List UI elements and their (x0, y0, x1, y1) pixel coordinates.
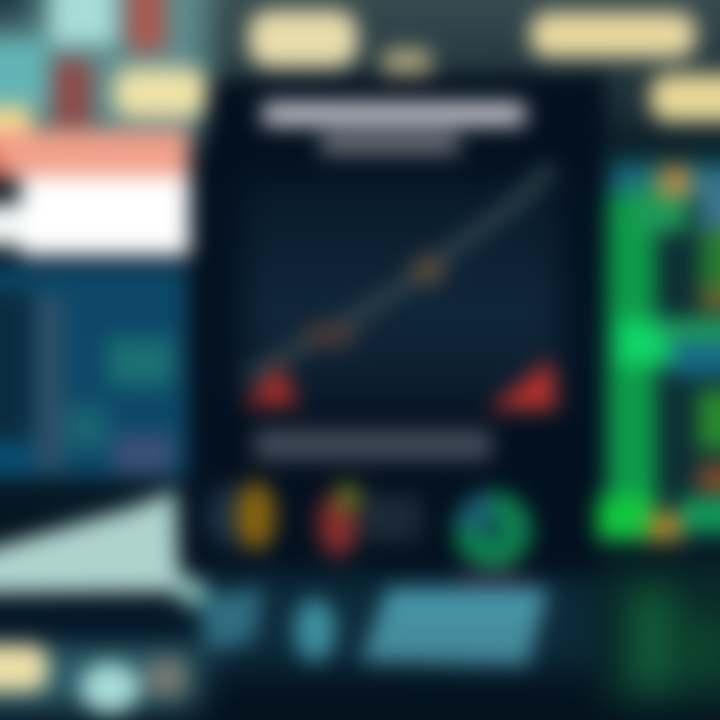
poster title (262, 102, 526, 154)
pie chart: red and green (318, 482, 422, 557)
pie chart: orange and navy (204, 481, 276, 551)
ceiling lights and top-left signs (0, 0, 720, 136)
red accent under donut (458, 572, 524, 582)
donut chart: green ring (454, 491, 532, 569)
poster caption (254, 430, 492, 460)
chart area (240, 175, 565, 410)
central dark poster (184, 72, 606, 574)
bottom right green reflection (630, 590, 720, 690)
right monitor: green grid (596, 148, 720, 543)
bottom-left objects (0, 644, 188, 714)
left monitor: blue screen (0, 266, 188, 478)
left monitor: red and white banner (0, 130, 190, 256)
line chart with red end markers (243, 165, 558, 410)
desk surface (0, 478, 208, 640)
bottom blue panel (198, 588, 548, 666)
